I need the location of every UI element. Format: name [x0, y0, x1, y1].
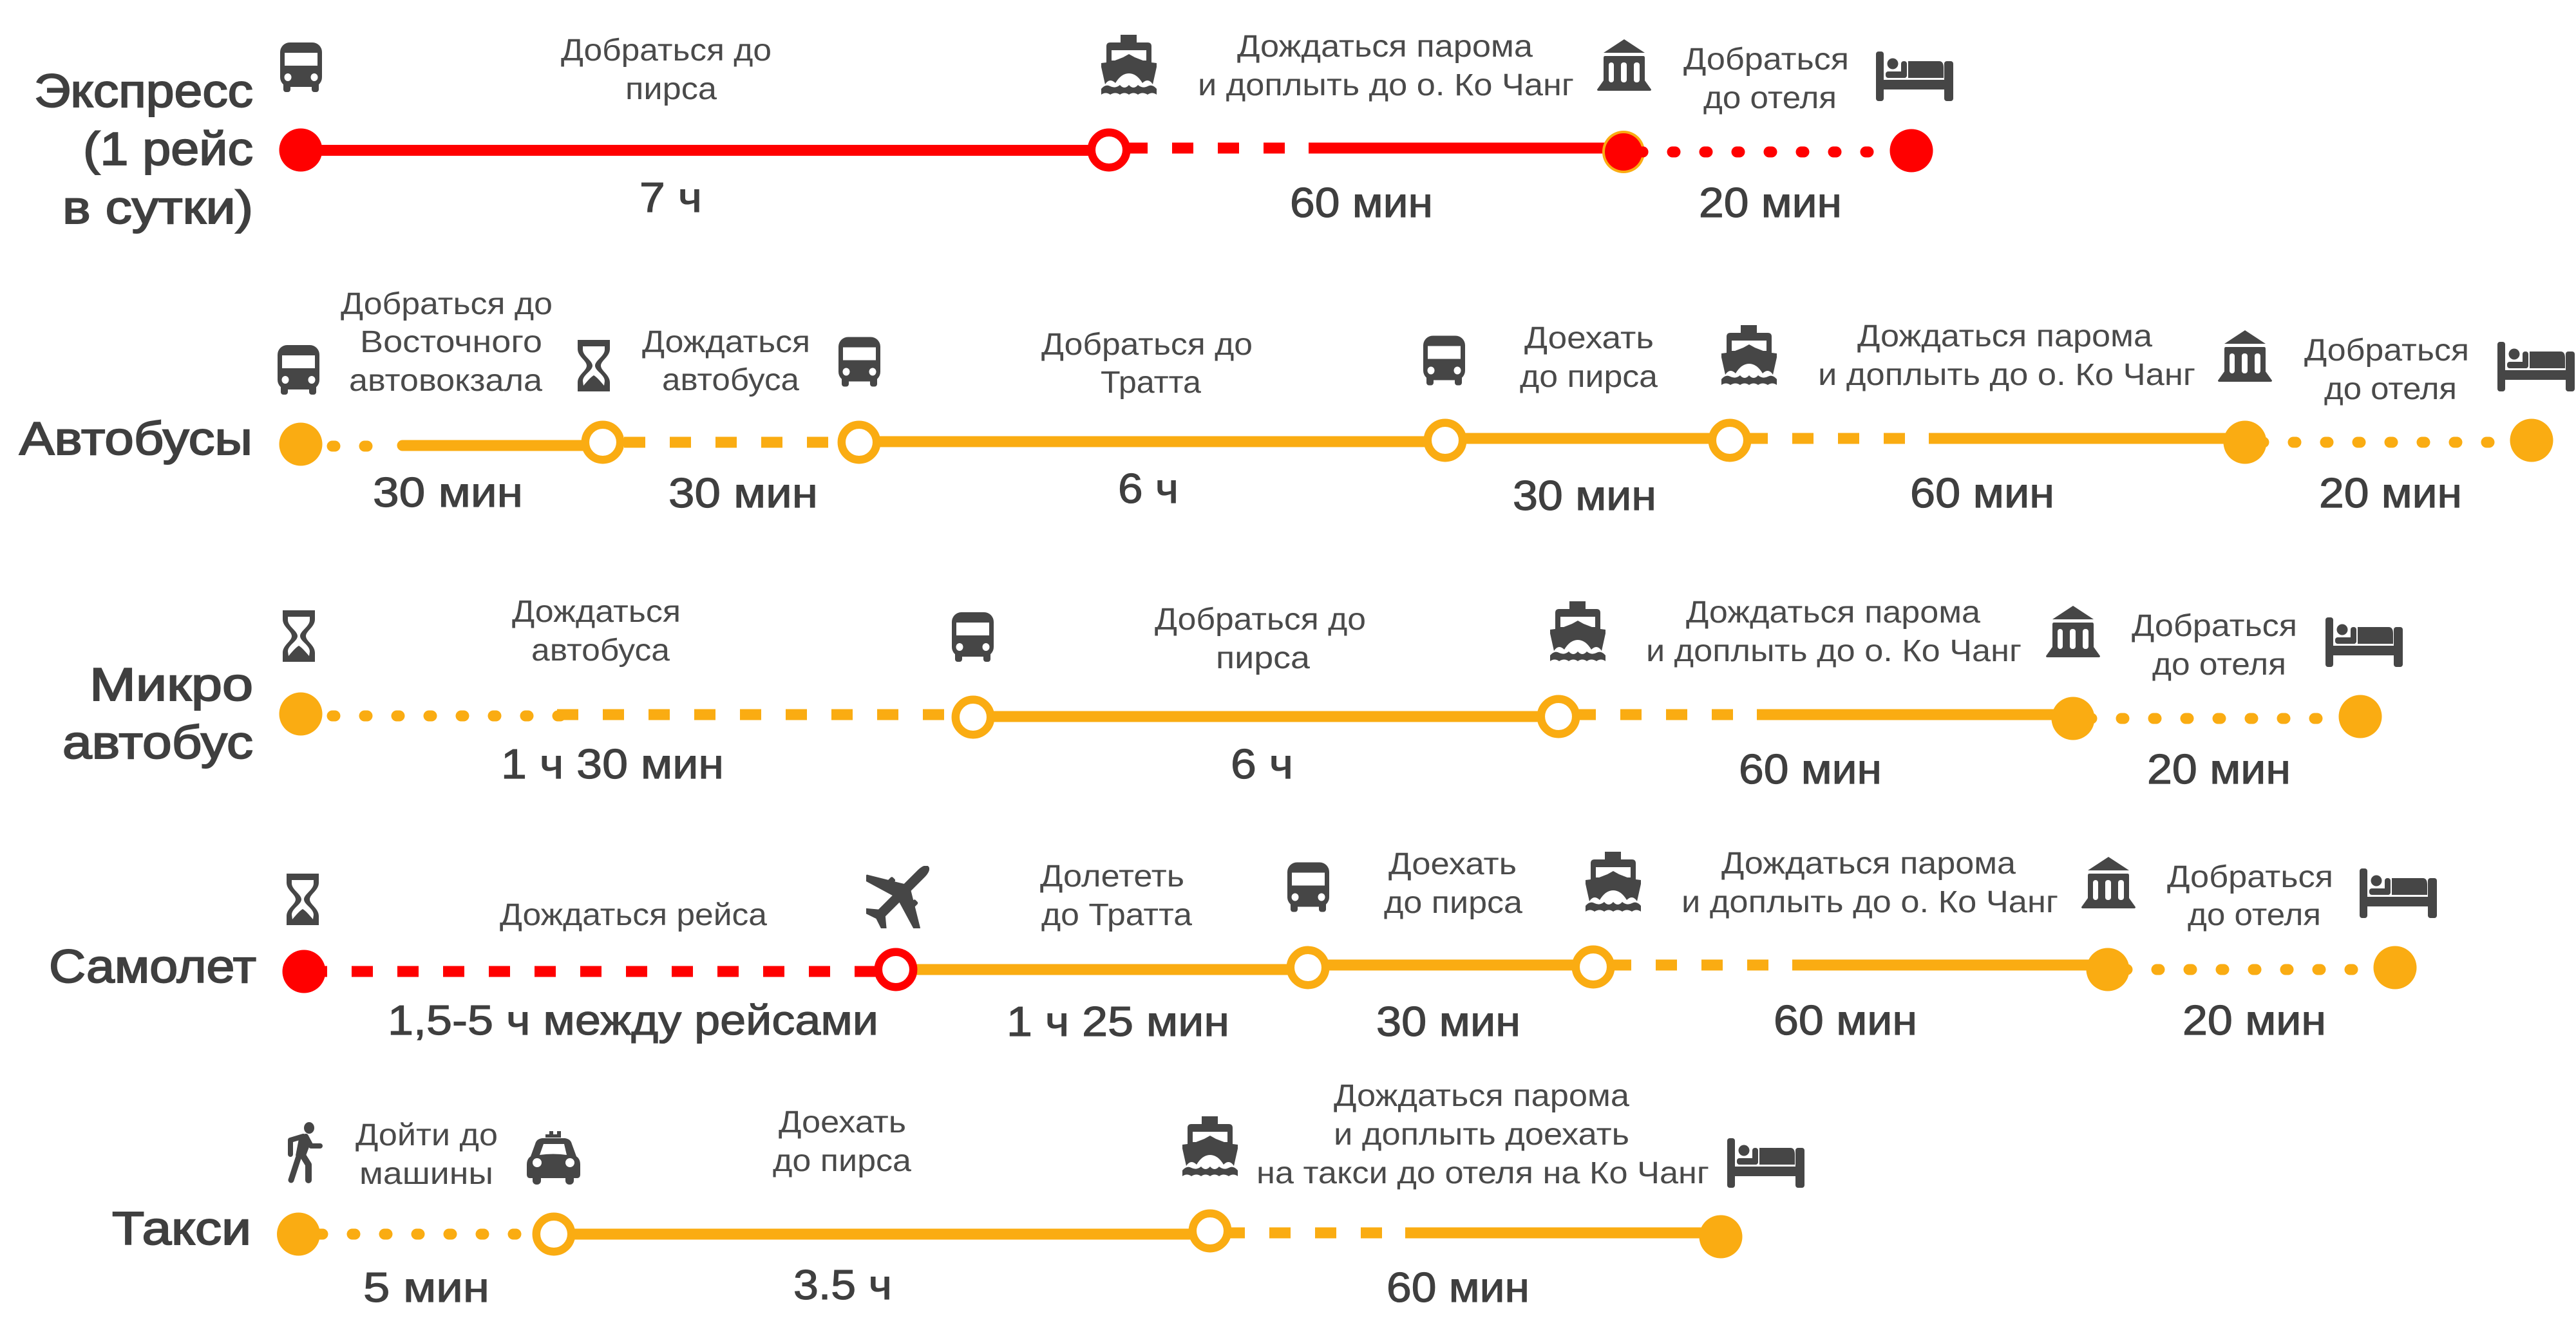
duration: 6 h: 6 ч — [1231, 740, 1293, 787]
label: ferry — [1681, 847, 2058, 919]
icon: bus — [278, 345, 319, 395]
label: to pier: пирса — [625, 72, 717, 106]
label: wait for bus — [512, 595, 681, 668]
label: to pier — [1520, 321, 1658, 394]
label: to eastern bus station: автовокзала — [349, 364, 542, 398]
label: to pier: до пирса — [1384, 886, 1522, 920]
icon: bus — [1287, 863, 1329, 912]
icon: bus — [952, 612, 994, 662]
duration: 20 min: 20 мин — [1699, 179, 1842, 226]
heading: Экспресс: (1 рейс — [83, 124, 253, 175]
label: ferry: и доплыть до о. Ко Чанг — [1646, 634, 2022, 668]
duration: 20 min: 20 мин — [2183, 997, 2326, 1044]
label: to Trat — [1041, 328, 1253, 400]
heading: Экспресс: в сутки) — [62, 182, 253, 234]
label: ferry and taxi to hotel: Дождаться парома — [1334, 1079, 1629, 1113]
icon: temple — [2046, 606, 2100, 657]
icon: temple — [1597, 39, 1651, 91]
label: to hotel: Добраться — [2304, 333, 2469, 368]
label: to hotel — [1683, 42, 1849, 115]
icon: bed — [2360, 868, 2437, 918]
label: to hotel: Добраться — [1683, 42, 1849, 77]
heading: Микро автобус: Микро — [90, 659, 253, 711]
route line: Экспресс — [279, 129, 1933, 173]
duration: 3.5 h: 3.5 ч — [793, 1261, 892, 1308]
label: to pier — [1384, 847, 1522, 920]
label: ferry and taxi to hotel: и доплыть доехать — [1334, 1118, 1629, 1152]
label: walk to car: Дойти до — [355, 1118, 498, 1152]
duration: 30 min: 30 мин — [1513, 472, 1656, 519]
label: ferry: Дождаться парома — [1857, 319, 2152, 353]
duration: 30 min: 30 мин — [1376, 998, 1520, 1045]
icon: ferry — [1721, 325, 1777, 385]
label: ferry: и доплыть до о. Ко Чанг — [1818, 358, 2195, 392]
label: to hotel — [2304, 333, 2469, 406]
label: ferry: Дождаться парома — [1721, 847, 2016, 881]
duration: 30 min: 30 мин — [668, 469, 818, 516]
icon: ferry — [1182, 1116, 1238, 1176]
label: to pier: Доехать — [779, 1105, 906, 1139]
label: to pier: Добраться до — [1155, 603, 1366, 637]
duration: 60 min: 60 мин — [1910, 469, 2054, 516]
label: wait for bus — [642, 325, 810, 397]
duration: 1 h 25 min: 1 ч 25 мин — [1007, 998, 1229, 1045]
icon: ferry — [1101, 35, 1157, 95]
route line: Микроавтобус — [279, 693, 2382, 740]
label: to pier: Добраться до — [561, 33, 772, 68]
label: to hotel: до отеля — [1703, 81, 1837, 115]
icon: hourglass — [283, 610, 315, 662]
label: to hotel: до отеля — [2324, 372, 2457, 406]
label: ferry: и доплыть до о. Ко Чанг — [1681, 885, 2058, 919]
icon: bus — [838, 337, 880, 386]
label: fly to Trat — [1040, 859, 1192, 932]
icon: bed — [1876, 52, 1953, 101]
heading: Микро автобус — [62, 659, 253, 769]
icon: walking person — [290, 1122, 320, 1180]
label: ferry and taxi to hotel: на такси до отеля на Ко Чанг — [1256, 1156, 1709, 1190]
label: fly to Trat: Долететь — [1040, 859, 1184, 894]
row: Экспресс — [34, 30, 1953, 234]
label: to hotel — [2167, 860, 2333, 932]
icon: temple — [2218, 330, 2272, 382]
icon: bed — [2325, 617, 2403, 667]
icon: bus — [280, 42, 322, 92]
duration: 5 min: 5 мин — [363, 1264, 489, 1311]
icon: ferry — [1550, 601, 1605, 661]
label: to pier: до пирса — [1520, 360, 1658, 394]
icon: hourglass — [578, 340, 610, 391]
duration: 1 h 30 min: 1 ч 30 мин — [501, 740, 724, 787]
row: Такси — [112, 1079, 1804, 1311]
heading: Самолет: Самолет — [49, 941, 256, 993]
icon: taxi — [527, 1131, 580, 1185]
label: to pier: пирса — [1216, 641, 1310, 675]
label: to eastern bus station — [341, 287, 553, 398]
row: Микроавтобус — [62, 595, 2403, 792]
label: walk to car — [355, 1118, 498, 1191]
label: to pier: Доехать — [1388, 847, 1517, 881]
label: ferry: Дождаться парома — [1686, 595, 1980, 630]
heading: Микро автобус: автобус — [62, 717, 253, 769]
label: to hotel: Добраться — [2132, 609, 2297, 643]
duration: 20 min: 20 мин — [2319, 469, 2462, 516]
row: Автобусы — [19, 287, 2575, 519]
label: to pier: до пирса — [773, 1144, 911, 1178]
label: wait for bus: Дождаться — [512, 595, 681, 629]
label: to hotel — [2132, 609, 2297, 682]
icon: hourglass — [287, 874, 319, 925]
label: to hotel: до отеля — [2152, 648, 2286, 682]
heading: Автобусы: Автобусы — [19, 413, 252, 465]
route line: Такси — [277, 1213, 1743, 1258]
label: wait for bus: автобуса — [662, 363, 799, 397]
icon: bed — [2497, 342, 2575, 391]
label: wait for bus: Дождаться — [642, 325, 810, 359]
route line: Автобусы — [279, 418, 2553, 466]
label: ferry — [1198, 30, 1574, 102]
label: fly to Trat: до Тратта — [1041, 898, 1192, 932]
label: to hotel: Добраться — [2167, 860, 2333, 894]
label: ferry — [1646, 595, 2022, 668]
heading: Экспресс: Экспресс — [34, 66, 253, 117]
icon: temple — [2081, 857, 2136, 908]
label: ferry and taxi to hotel — [1256, 1079, 1709, 1190]
icon: bus — [1423, 336, 1465, 385]
duration: 6 h: 6 ч — [1118, 465, 1179, 512]
label: to Trat: Тратта — [1101, 366, 1201, 400]
label: ferry: Дождаться парома — [1237, 30, 1533, 64]
duration: 60 min: 60 мин — [1774, 997, 1917, 1044]
icon: bed — [1727, 1138, 1804, 1188]
row: Самолет — [49, 839, 2437, 1045]
duration: 60 min: 60 мин — [1387, 1264, 1530, 1311]
heading: Экспресс — [34, 66, 253, 234]
duration: 60 min: 60 мин — [1739, 746, 1882, 792]
duration: 20 min: 20 мин — [2147, 746, 2291, 792]
label: ferry: и доплыть до о. Ко Чанг — [1198, 68, 1574, 102]
label: walk to car: машины — [359, 1157, 493, 1191]
label: to pier: Доехать — [1524, 321, 1654, 355]
duration: 60 min: 60 мин — [1290, 179, 1433, 226]
label: to pier — [561, 33, 772, 106]
label: wait for flight: Дождаться рейса — [500, 898, 767, 932]
icon: plane — [846, 839, 955, 949]
duration: 7 h: 7 ч — [639, 174, 702, 221]
label: to eastern bus station: Восточного — [360, 325, 542, 359]
label: ferry — [1818, 319, 2195, 392]
heading: Такси: Такси — [112, 1203, 251, 1255]
duration: between flights: 1,5-5 ч между рейсами — [388, 997, 878, 1044]
route line: Самолет — [282, 946, 2416, 993]
duration: 30 min: 30 мин — [373, 469, 523, 516]
label: wait for bus: автобуса — [531, 633, 670, 668]
label: to pier — [773, 1105, 911, 1178]
label: to eastern bus station: Добраться до — [341, 287, 553, 321]
label: to hotel: до отеля — [2188, 898, 2321, 932]
icon: ferry — [1586, 852, 1641, 912]
label: to Trat: Добраться до — [1041, 328, 1253, 362]
label: to pier — [1155, 603, 1366, 675]
